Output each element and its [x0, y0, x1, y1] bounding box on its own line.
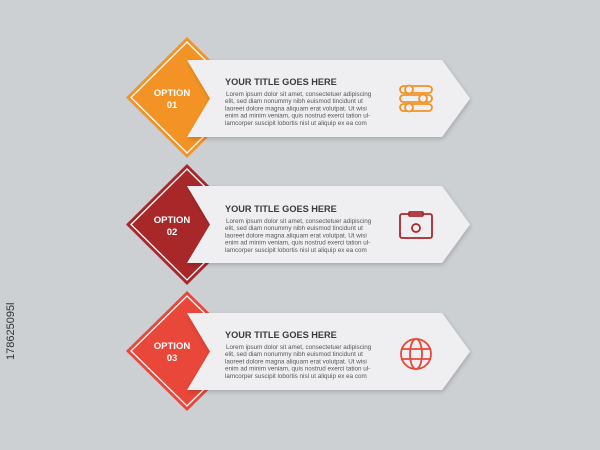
body 02: enim ad minim veniam, quis nostrud exerci tation ul- — [225, 240, 370, 247]
label 03: OPTION — [154, 341, 190, 352]
diamond 01 — [126, 37, 248, 158]
body 03: laoreet dolore magna aliquam erat volutpat. Ut wisi — [225, 358, 367, 365]
diamond 02 — [126, 164, 248, 285]
body 02: lamcorper suscipit lobortis nisl ut aliquip ex ea com — [225, 247, 367, 254]
icon: camera — [400, 212, 432, 238]
card 02 — [187, 186, 470, 263]
panel: option 02 — [126, 164, 470, 285]
card 01 — [187, 60, 470, 137]
body 03: lamcorper suscipit lobortis nisl ut aliquip ex ea com — [225, 373, 367, 380]
watermark id: 178625095l — [5, 302, 17, 360]
title 03: YOUR TITLE GOES HERE — [225, 330, 337, 340]
body 01: enim ad minim veniam, quis nostrud exerci tation ul- — [225, 113, 370, 120]
body 01: elit, sed diam nonummy nibh euismod tincidunt ut — [225, 98, 363, 105]
body 03: Lorem ipsum dolor sit amet, consectetuer adipiscing — [226, 344, 372, 351]
body 02: Lorem ipsum dolor sit amet, consectetuer adipiscing — [226, 218, 372, 225]
diamond 03 — [126, 291, 248, 411]
body 03: enim ad minim veniam, quis nostrud exerci tation ul- — [225, 366, 370, 373]
label 03: 03 — [167, 353, 177, 364]
label 01: 01 — [167, 100, 178, 111]
icon: globe — [401, 339, 431, 369]
body 01: lamcorper suscipit lobortis nisl ut aliquip ex ea com — [225, 120, 367, 127]
body 03: elit, sed diam nonummy nibh euismod tincidunt ut — [225, 351, 363, 358]
body 01: laoreet dolore magna aliquam erat volutpat. Ut wisi — [225, 105, 367, 112]
card 03 — [187, 313, 470, 390]
panel: option 03 — [126, 291, 470, 411]
title 02: YOUR TITLE GOES HERE — [225, 204, 337, 214]
label 02: 02 — [167, 227, 177, 238]
panel: option 01 — [126, 37, 470, 158]
icon: sliders — [400, 86, 432, 112]
body 02: laoreet dolore magna aliquam erat volutpat. Ut wisi — [225, 232, 367, 239]
label 02: OPTION — [154, 215, 190, 226]
body 01: Lorem ipsum dolor sit amet, consectetuer adipiscing — [226, 91, 372, 98]
body 02: elit, sed diam nonummy nibh euismod tincidunt ut — [225, 225, 363, 232]
title 01: YOUR TITLE GOES HERE — [225, 77, 337, 87]
label 01: OPTION — [154, 88, 190, 99]
